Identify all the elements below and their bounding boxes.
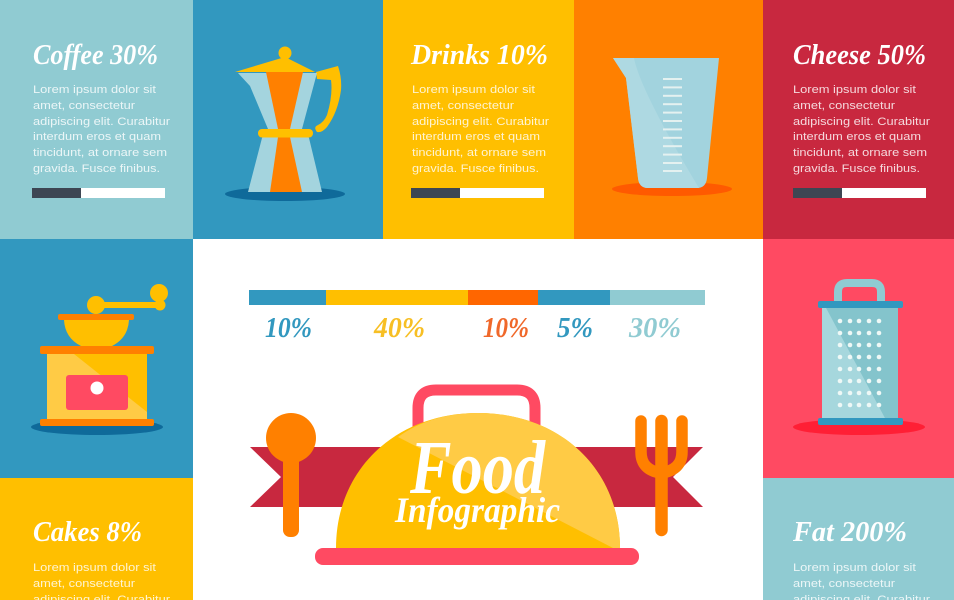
text block: coffee: interdum eros et quam xyxy=(33,131,161,143)
text block: cheese: tincidunt, at ornare sem xyxy=(793,147,927,159)
heading: coffee: Coffee 30% xyxy=(33,39,158,71)
icon: spoon xyxy=(266,413,316,537)
icon: coffee grinder xyxy=(31,284,168,435)
text block: drinks: tincidunt, at ornare sem xyxy=(412,147,546,159)
text block: cakes: amet, consectetur xyxy=(33,578,135,590)
percentage labels: 10% xyxy=(265,313,312,344)
icon: fork xyxy=(641,421,682,530)
heading: fat: Fat 200% xyxy=(792,516,907,548)
heading: cheese: Cheese 50% xyxy=(793,39,926,71)
ribbon banner xyxy=(250,447,703,507)
percentage labels xyxy=(265,313,681,344)
text block: fat xyxy=(793,562,930,600)
text block: cakes: Lorem ipsum dolor sit xyxy=(33,562,157,574)
icon: measuring cup xyxy=(612,58,732,196)
text block: coffee: amet, consectetur xyxy=(33,100,135,112)
panel: fat xyxy=(763,478,954,600)
percentage labels: 30% xyxy=(628,313,681,344)
panel: grater xyxy=(763,239,954,478)
icon: coffee pot xyxy=(225,46,345,201)
text block: cheese: gravida. Fusce finibus. xyxy=(793,163,920,175)
panel: cakes xyxy=(0,478,193,600)
icon: cloche dome xyxy=(336,413,620,548)
percentage labels: 5% xyxy=(557,313,593,344)
text block: cheese: adipiscing elit. Curabitur xyxy=(793,116,930,128)
panel: drinks xyxy=(383,0,574,239)
text block: drinks: interdum eros et quam xyxy=(412,131,540,143)
panel: coffee grinder xyxy=(0,239,193,478)
icon: grater xyxy=(793,283,925,435)
progress bar: drinks xyxy=(411,188,544,198)
text block: fat: amet, consectetur xyxy=(793,578,895,590)
text block: drinks: gravida. Fusce finibus. xyxy=(412,163,539,175)
text block: cheese: Lorem ipsum dolor sit xyxy=(793,84,917,96)
panel: central summary xyxy=(193,239,763,600)
text block: coffee: adipiscing elit. Curabitur xyxy=(33,116,170,128)
text block: fat: Lorem ipsum dolor sit xyxy=(793,562,917,574)
icon: cloche handle xyxy=(418,390,535,440)
progress bar: coffee xyxy=(32,188,165,198)
text block: coffee xyxy=(33,84,170,175)
icon: serving plate xyxy=(315,548,639,565)
text block: cheese: interdum eros et quam xyxy=(793,131,921,143)
heading: drinks: Drinks 10% xyxy=(410,39,548,71)
progress bar: cheese xyxy=(793,188,926,198)
panel: measuring cup xyxy=(574,0,763,239)
panel: coffee xyxy=(0,0,193,239)
percentage labels: 10% xyxy=(483,313,529,344)
text block: cheese xyxy=(793,84,930,175)
title: Infographic xyxy=(394,490,560,530)
title: Food xyxy=(409,426,546,510)
percentage labels: 40% xyxy=(373,313,425,344)
text block: cakes xyxy=(33,562,170,600)
text block: coffee: Lorem ipsum dolor sit xyxy=(33,84,157,96)
panel: coffee pot xyxy=(193,0,383,239)
text block: drinks: adipiscing elit. Curabitur xyxy=(412,116,549,128)
title xyxy=(394,426,560,530)
text block: drinks xyxy=(412,84,549,175)
heading: cakes: Cakes 8% xyxy=(33,516,142,548)
text block: coffee: gravida. Fusce finibus. xyxy=(33,163,160,175)
text block: drinks: amet, consectetur xyxy=(412,100,514,112)
text block: drinks: Lorem ipsum dolor sit xyxy=(412,84,536,96)
text block: cheese: amet, consectetur xyxy=(793,100,895,112)
stacked percentage bar xyxy=(249,290,705,305)
panel: cheese xyxy=(763,0,954,239)
text block: coffee: tincidunt, at ornare sem xyxy=(33,147,167,159)
